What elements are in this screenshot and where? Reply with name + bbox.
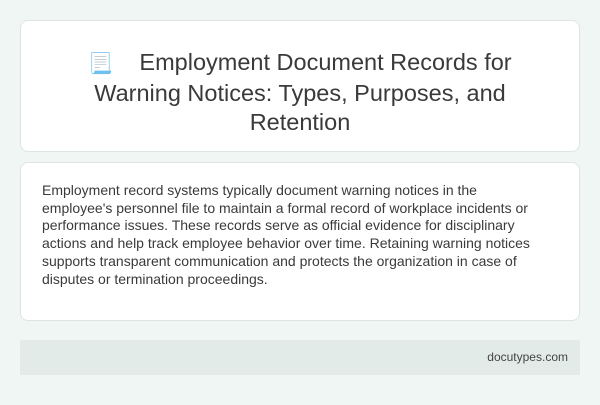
footer: docutypes.com: [487, 350, 568, 364]
text block: supports transparent communication and protects the organization in case of: [42, 253, 517, 269]
text block: Employment record systems typically document warning notices in the: [42, 182, 477, 198]
panel: description: [20, 162, 580, 321]
footer: [20, 340, 580, 375]
panel: title: [20, 20, 580, 152]
text block: employee's personnel file to maintain a formal record of workplace incidents or: [42, 200, 528, 216]
text block: [42, 182, 530, 287]
text block: actions and help track employee behavior over time. Retaining warning notices: [42, 235, 530, 251]
title: 📃 Employment Document Records for Warning Notices: Types, Purposes, and Retention: [88, 49, 512, 135]
text block: disputes or termination proceedings.: [42, 271, 268, 287]
text block: performance issues. These records serve as official evidence for disciplinary: [42, 217, 515, 233]
